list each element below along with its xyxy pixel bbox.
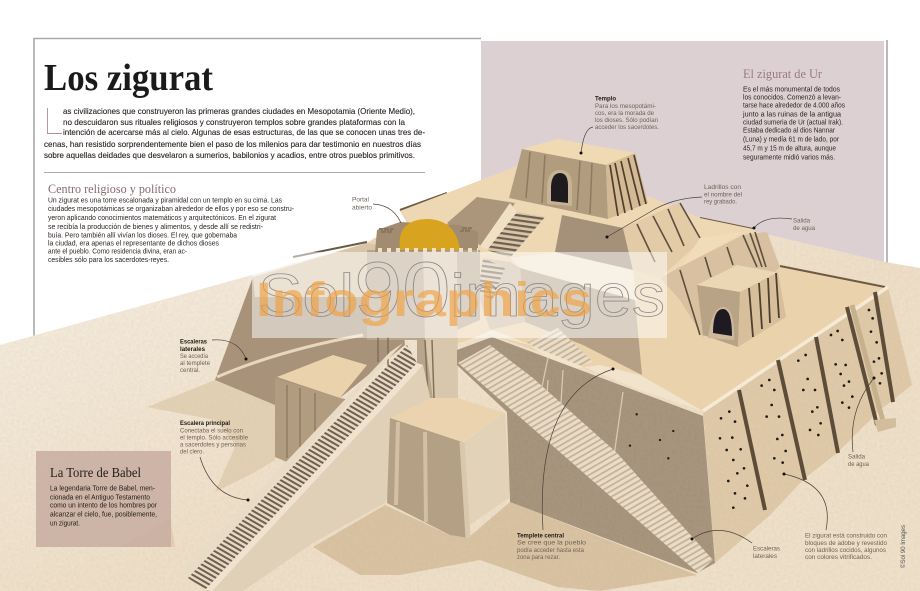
credit: ©Sol 90 Images [900,525,907,568]
gate building on tier 1 right [697,265,786,347]
panel: El zigurat de Ur: Es el más monumental de todos [743,86,840,94]
small side stair [527,328,593,370]
label: Templete central: Templete central [517,534,564,540]
label: Escaleras laterales (left): laterales [180,347,206,353]
icon: golden dome [400,219,460,250]
watermark: Infographics: Infographics [256,274,592,327]
ground shadows [120,380,697,591]
label: Portal abierto: Portal [352,198,369,204]
panel: El zigurat de Ur: los conocidos. Comenzó a levan- [743,94,842,102]
back parapets [293,193,885,287]
label: Templete central: podía acceder hasta esta [517,548,585,554]
central tower with dome [367,219,480,400]
text block: Centro religioso: ciudades mesopotámicas se organizaban alrededor de ellos y por eso se constru- [48,206,295,213]
label: Ladrillos: rey grabado. [704,200,737,206]
panel: El zigurat de Ur: ciudad sumeria de Ur (actual Irak). [743,120,843,126]
label: Templete central: Se cree que la pueblo [517,540,587,546]
left lateral wall [215,277,405,405]
panel: El zigurat de Ur: 45,7 m y 15 m de altura, aunque [743,146,836,152]
label: Escaleras laterales (left): al templete [180,361,211,367]
title: Los zigurat [44,57,213,99]
intro text [44,107,425,160]
label: Escaleras laterales (left): central. [180,368,200,374]
intro text: cenas, han resistido sorprendentemente bien el paso de los milenios para dar testimonio en nuestros días [44,140,421,149]
label: Escalera principal: a sacerdotes y personas [180,442,246,448]
text block: Centro religioso: se recibía la producción de bienes y alimentos, y desde allí se redistri- [48,224,264,231]
label: Salida de agua (bottom) [848,376,876,468]
panel: El zigurat de Ur: Estaba dedicado al dios Nannar [743,128,836,134]
label: Escalera principal: Escalera principal [180,421,230,427]
main stairway [177,343,430,591]
text block: Centro religioso: buía. Pero también allí vivían los dioses. El rey, que gobernaba [48,232,237,240]
label: Escalera principal [180,421,250,502]
label: Salida de agua (top): de agua [793,226,816,232]
label: Templo: los dioses. Sólo podían [595,118,658,124]
block right of main stair [387,398,510,538]
heading: La Torre de Babel [50,466,141,481]
panel: La Torre de Babel: un zigurat. [50,520,80,528]
label: Templete central [517,368,614,561]
label: Escaleras laterales (left) [180,340,248,374]
drop cap [48,108,62,134]
label: Templo: Para los mesopotámi- [595,104,656,110]
label: Escaleras laterales (bottom): laterales [753,554,777,560]
crenellated wall [375,222,478,252]
label: Portal abierto: abierto [352,206,373,212]
label: construction note [782,472,888,561]
label: Templete central: zona para rezar. [517,555,560,561]
panel: La Torre de Babel: cionada en el Antiguo Testamento [50,494,150,502]
label: construction note: con colores vitrificados. [805,555,872,561]
left upper surface [253,243,400,300]
tier 1 right face [629,287,912,563]
buttresses [739,292,893,510]
page frame [34,38,887,347]
heading: El zigurat de Ur [743,66,823,81]
panel: La Torre de Babel: alcanzar el cielo, fue, posiblemente, [50,512,157,518]
label: Escalera principal: Conectaba el suelo con [180,428,243,434]
panel: mauve background [481,41,884,266]
label: Templo [580,96,659,154]
label: construction note: El zigurat está construido con [805,534,887,540]
label: Templo: acceder los sacerdotes. [595,125,659,131]
panel: La Torre de Babel [36,451,171,547]
watermark band [252,252,667,338]
label: Templo: Templo [595,96,616,102]
label: Escalera principal: del clero. [180,450,204,456]
right lateral stair [458,345,713,573]
panel: El zigurat de Ur: tarse hace alrededor de 4.000 años [743,102,845,110]
label: Ladrillos [606,185,742,238]
label: Salida de agua (top): Salida [793,218,811,224]
drainage holes [719,309,883,475]
text block: Centro religioso: ante el pueblo. Como residencia divina, eran ac- [48,248,188,256]
label: Salida de agua (top) [752,218,816,232]
tier 2 right block [555,215,633,270]
panel: El zigurat de Ur: junto a las ruinas de la antigua [742,112,841,118]
intro text: sobre aquellas deidades que desvelaron a sumerios, babilonios y acadios, entre otros pueblos primitivos. [44,151,415,160]
block left of main stair [275,355,367,462]
text block: Centro religioso [48,198,295,264]
central light terraces [510,252,637,302]
watermark: Sol90images: Sol90images [258,245,665,333]
panel: El zigurat de Ur: seguramente midió varios más. [743,154,835,162]
panel: El zigurat de Ur: (Luna) y medía 61 m de lado, por [743,136,840,144]
intro text: no descuidaron sus rituales religiosos y construyeron templos sobre grandes plataformas con la [63,118,406,127]
heading: Centro religioso y político: Centro religioso y político [48,181,176,196]
text block: Centro religioso: cesibles sólo para los sacerdotes-reyes. [48,257,169,264]
right tier wall with buttresses [660,232,780,337]
label: Escaleras laterales (bottom): Escaleras [753,546,780,552]
label: Templo: cos, era la morada de [595,111,655,117]
text block: Centro religioso: la ciudad, era apenas el representante de dichos dioses [48,240,219,248]
label: Portal abierto [352,198,401,223]
label: construction note: con ladrillos cocidos, algunos [805,548,886,554]
label: Escalera principal: el templo. Sólo accesible [180,436,249,442]
panel: El zigurat de Ur [742,66,845,162]
intro text: intención de acercarse más al cielo. Algunas de esas estructuras, de las que se conocen unas tres de- [63,128,425,137]
tier 2 central stair [487,212,545,258]
temple door [547,170,572,206]
text block: Centro religioso: Un zigurat es una torre escalonada y piramidal con un templo en su cima. Las [48,198,282,204]
tier 1 front face [457,337,715,573]
tier 2 left block [447,197,515,250]
panel: La Torre de Babel: como un intento de los hombres por [50,502,158,510]
label: Escaleras laterales (left): Se accedía [180,354,209,360]
upper right buttress face [623,202,702,278]
ground [0,210,920,591]
ziggurat [177,139,912,591]
label: Ladrillos: Ladrillos con [704,185,741,191]
label: Escaleras laterales (left): Escaleras [180,340,208,346]
label: Salida de agua (bottom): Salida [848,454,866,460]
text block: Centro religioso: yeron aplicando conocimientos matemáticos y arquitectónicos. En el zigurat [48,215,276,222]
label: construction note: bloques de adobe y revestido [805,541,888,547]
intro text: as civilizaciones que construyeron las primeras grandes ciudades en Mesopotamia (Oriente Medio), [63,107,415,116]
tier 2 surface [400,165,780,290]
label: Escaleras laterales (bottom) [690,530,780,560]
tier 1 top surface [367,222,888,411]
panel: La Torre de Babel: La legendaria Torre de Babel, men- [50,486,156,492]
temple [509,139,648,219]
label: Ladrillos: el nombre del [704,192,742,198]
label: Salida de agua (bottom): de agua [848,462,870,468]
